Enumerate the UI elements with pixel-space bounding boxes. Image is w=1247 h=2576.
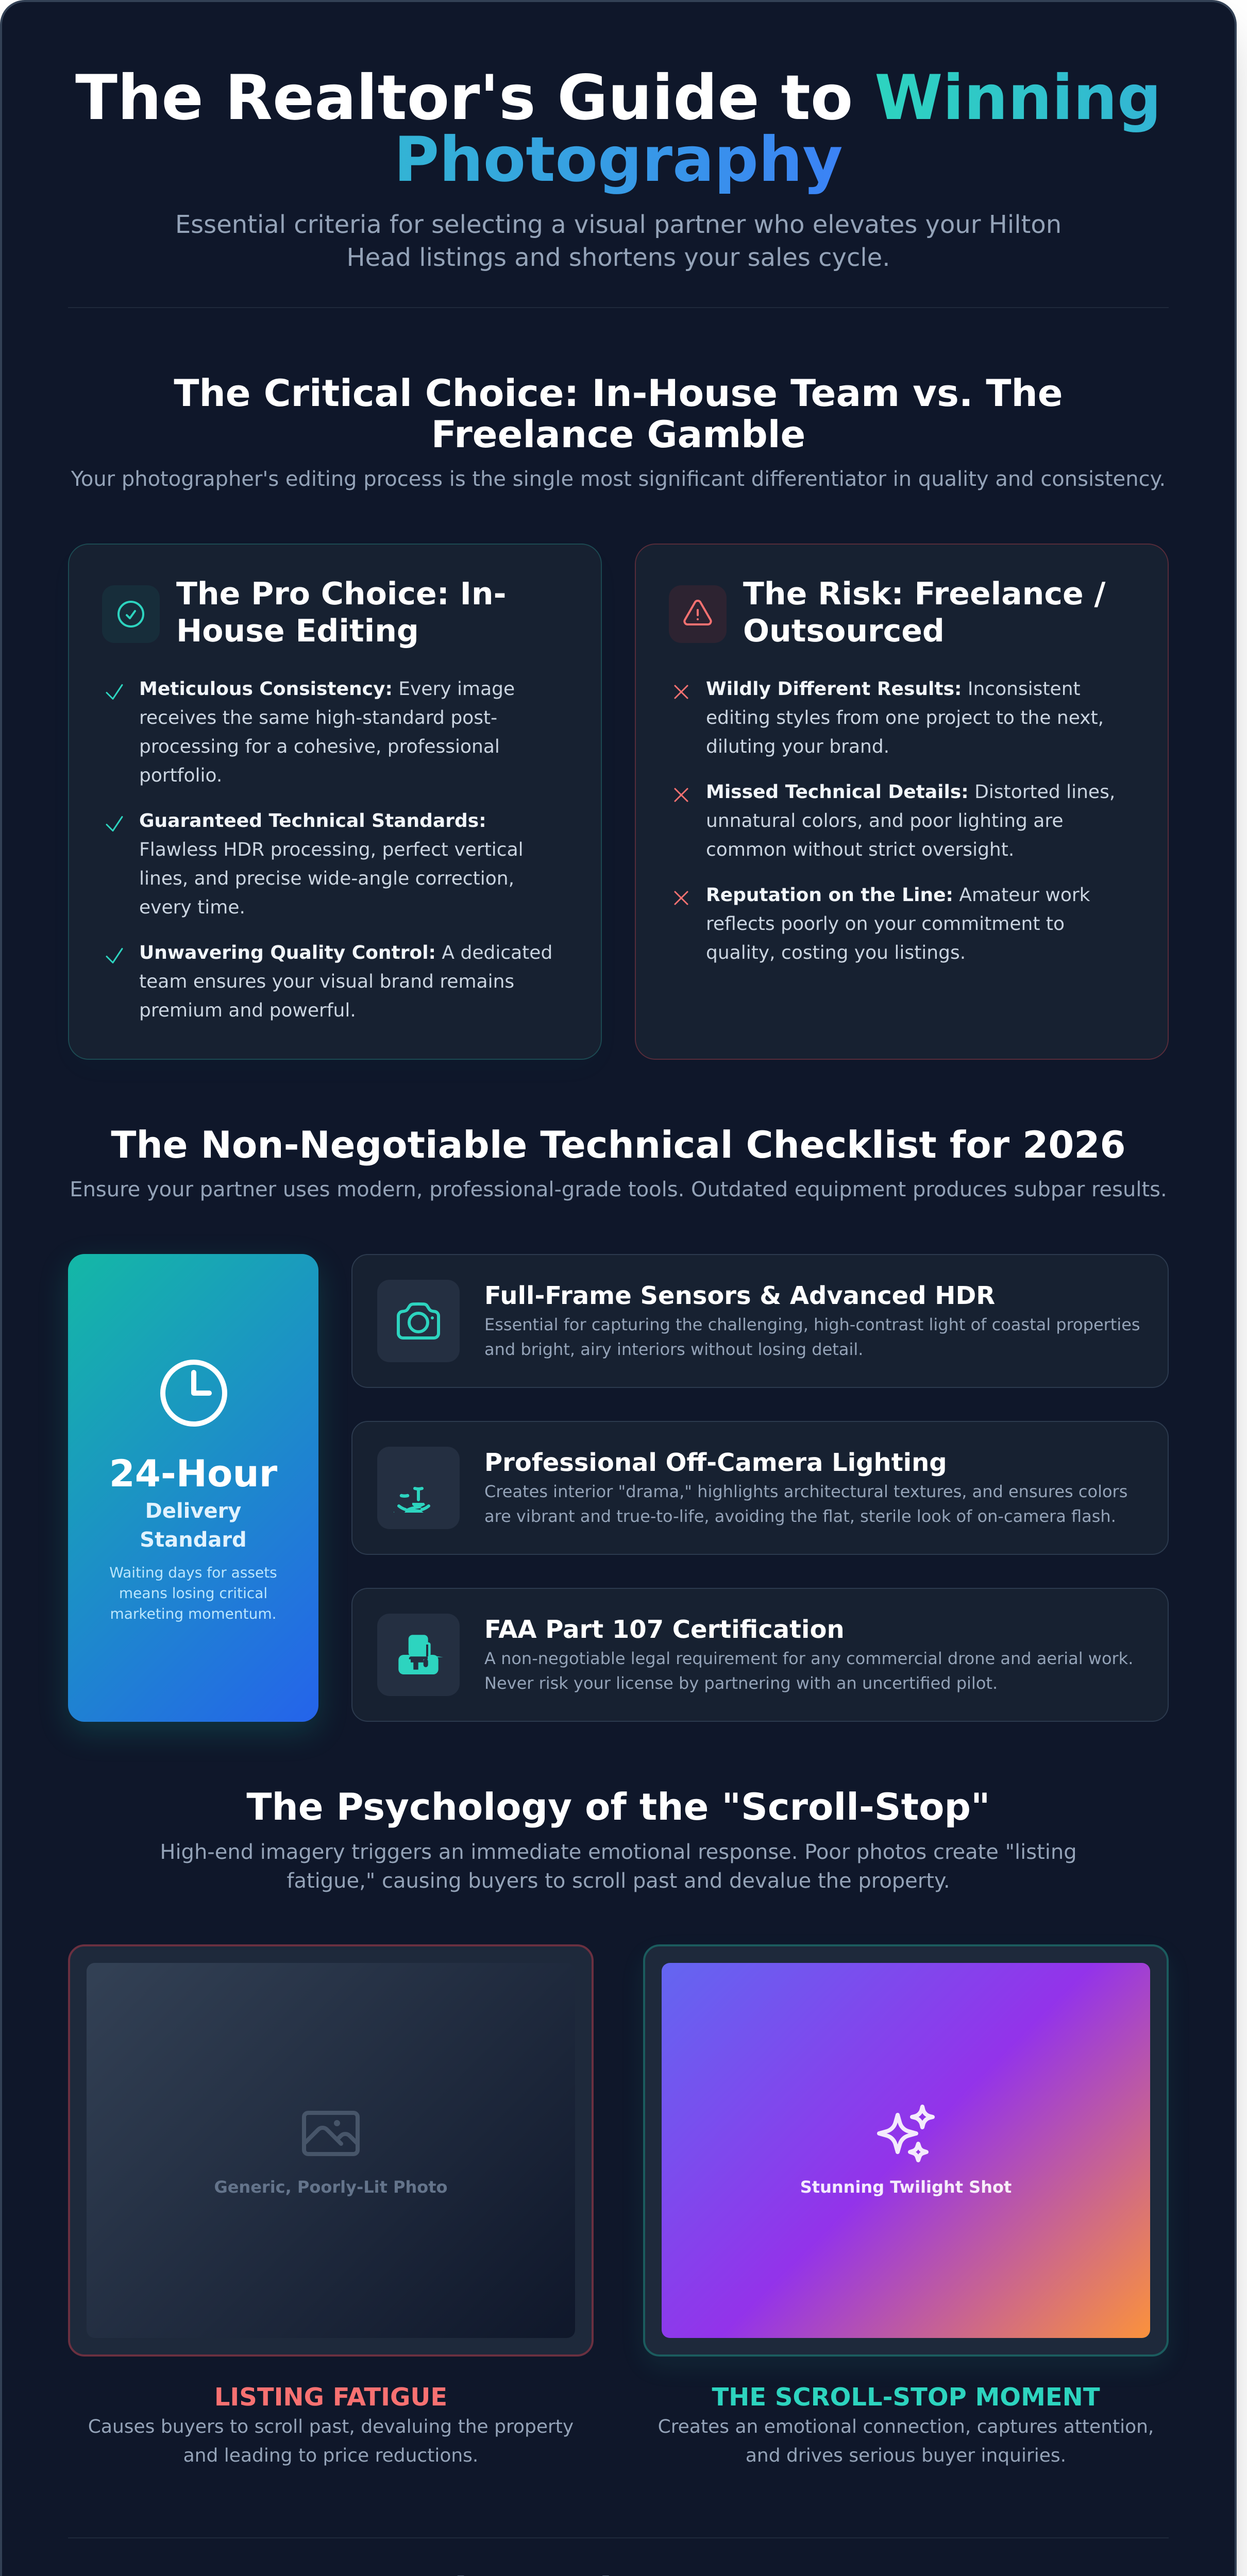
item description [484, 1315, 1140, 1359]
list item: meticulous consistency: Meticulous Consistency: Every image [139, 679, 515, 700]
item description: Creates interior "drama," highlights architectural textures, and ensures colors [484, 1482, 1127, 1501]
list item: guaranteed technical standards: lines, and precise wide-angle correction, [139, 868, 514, 889]
item description: are vibrant and true-to-life, avoiding the flat, sterile look of on-camera flash. [484, 1506, 1116, 1526]
list item: missed technical details: common without strict oversight. [706, 839, 1014, 860]
list item: unwavering quality control: premium and powerful. [139, 1000, 356, 1021]
list item: reputation on the line: Reputation on the Line: Amateur work [706, 885, 1090, 906]
item description: Never risk your license by partnering with an uncertified pilot. [484, 1673, 998, 1693]
icon: photo [298, 2100, 364, 2166]
callout label: Delivery [145, 1499, 241, 1523]
list item: meticulous consistency: processing for a cohesive, professional [139, 736, 500, 757]
icon: check circle [102, 585, 160, 643]
list item: missed technical details [706, 782, 1115, 860]
icon: cross [674, 685, 688, 699]
callout note: Waiting days for assets [109, 1564, 277, 1581]
section intro: emotional response [68, 1838, 1169, 1895]
panel: off-camera lighting [351, 1421, 1169, 1555]
title: The Realtor's Guide to Winning [75, 62, 1161, 134]
item description [484, 1646, 1133, 1696]
icon: cross [674, 788, 688, 802]
caption heading: listing fatigue: LISTING FATIGUE [214, 2383, 447, 2412]
caption text: scroll-stop moment: and drives serious buyer inquiries. [746, 2445, 1066, 2466]
callout: 24-hour delivery standard [68, 1254, 318, 1722]
section intro: emotional response: fatigue," causing buyers to scroll past and devalue the property. [287, 1869, 950, 1893]
icon: drone [377, 1614, 460, 1696]
list item: wildly different results: editing styles from one project to the next, [706, 707, 1104, 728]
callout note [109, 1564, 277, 1622]
list item: unwavering quality control: Unwavering Quality Control: A dedicated [139, 942, 552, 963]
list item: guaranteed technical standards: Guaranteed Technical Standards: [139, 810, 486, 832]
item title: Full-Frame Sensors & Advanced HDR [484, 1281, 995, 1310]
item description [484, 1482, 1127, 1526]
item description: A non-negotiable legal requirement for any commercial drone and aerial work. [484, 1649, 1133, 1668]
icon: lighting [377, 1447, 460, 1529]
icon: clock [160, 1360, 227, 1427]
icon: check [106, 948, 123, 963]
item title: FAA Part 107 Certification [484, 1615, 845, 1644]
icon: warning triangle [669, 585, 727, 643]
list item: guaranteed technical standards: every time. [139, 897, 245, 918]
list item: meticulous consistency: portfolio. [139, 765, 222, 786]
callout note: marketing momentum. [110, 1605, 277, 1622]
list item: guaranteed technical standards [139, 810, 524, 918]
heading: the critical choice: The Critical Choice: In-House Team vs. The [174, 371, 1063, 415]
list item: unwavering quality control [139, 942, 552, 1021]
icon: camera [377, 1280, 460, 1362]
caption text: scroll-stop moment [643, 2413, 1169, 2470]
callout label: Standard [140, 1528, 247, 1552]
callout note: means losing critical [119, 1585, 267, 1602]
image label: Stunning Twilight Shot [800, 2177, 1012, 2197]
title [75, 62, 1161, 196]
list item: guaranteed technical standards: Flawless HDR processing, perfect vertical [139, 839, 524, 860]
caption text: listing fatigue: Causes buyers to scroll past, devaluing the property [88, 2416, 574, 2437]
panel heading: Outsourced [743, 613, 945, 649]
icon: check [106, 816, 123, 832]
section intro: editing process: Your photographer's editing process is the single most significant differentiator in quality and consistency. [71, 467, 1166, 491]
list item: reputation on the line: quality, costing you listings. [706, 942, 966, 963]
list item: meticulous consistency [139, 679, 515, 786]
item description: Essential for capturing the challenging, high-contrast light of coastal properties [484, 1315, 1140, 1334]
subtitle: Head listings and shortens your sales cycle. [347, 243, 890, 272]
section intro: modern tools: Ensure your partner uses modern, professional-grade tools. Outdated equipment produces subpar results. [70, 1178, 1167, 1201]
caption text: listing fatigue: and leading to price reductions. [183, 2445, 478, 2466]
heading: the critical choice: Freelance Gamble [431, 413, 805, 456]
panel: faa part 107 [351, 1588, 1169, 1722]
panel heading [176, 576, 507, 649]
icon: sparkles [873, 2100, 939, 2166]
image label: Generic, Poorly-Lit Photo [214, 2177, 448, 2197]
list item: wildly different results: diluting your brand. [706, 736, 889, 757]
heading: the critical choice [174, 371, 1063, 456]
panel: the risk freelance outsourced [635, 544, 1169, 1060]
panel: generic photo [68, 1944, 594, 2357]
list item: reputation on the line: reflects poorly on your commitment to [706, 913, 1065, 935]
list item: missed technical details: unnatural colors, and poor lighting are [706, 810, 1063, 832]
caption heading: scroll-stop moment: THE SCROLL-STOP MOMENT [712, 2383, 1100, 2412]
panel heading [743, 576, 1106, 649]
title: Photography [394, 124, 843, 196]
list item: unwavering quality control: team ensures your visual brand remains [139, 971, 514, 992]
subtitle [175, 210, 1061, 272]
caption text: scroll-stop moment: Creates an emotional connection, captures attention, [658, 2416, 1154, 2437]
item description: and bright, airy interiors without losing detail. [484, 1340, 863, 1359]
list item: meticulous consistency: receives the same high-standard post- [139, 707, 497, 728]
panel: twilight shot [643, 1944, 1169, 2357]
list item: wildly different results: Wildly Different Results: Inconsistent [706, 679, 1081, 700]
caption text: listing fatigue [68, 2413, 594, 2470]
panel heading: The Pro Choice: In- [176, 576, 507, 612]
callout label [140, 1499, 247, 1552]
list item: wildly different results [706, 679, 1104, 757]
icon: cross [674, 891, 688, 905]
image placeholder: twilight [662, 1963, 1150, 2338]
panel: pro choice in-house editing [68, 544, 602, 1060]
panel: full-frame sensors [351, 1254, 1169, 1388]
heading: technical checklist: The Non-Negotiable Technical Checklist for 2026 [111, 1123, 1126, 1166]
icon: check [106, 684, 123, 700]
subtitle: Essential criteria for selecting a visual partner who elevates your Hilton [175, 210, 1061, 239]
list item: reputation on the line [706, 885, 1090, 963]
image placeholder: poorly-lit [87, 1963, 575, 2338]
callout number: 24-Hour [109, 1452, 277, 1495]
section intro: emotional response: High-end imagery triggers an immediate emotional response. Poor photos create "listing [160, 1840, 1077, 1864]
heading: psychology of the scroll-stop: The Psychology of the "Scroll-Stop" [246, 1785, 990, 1828]
item title: Professional Off-Camera Lighting [484, 1448, 947, 1477]
panel heading: The Risk: Freelance / [743, 576, 1105, 612]
list item: missed technical details: Missed Technical Details: Distorted lines, [706, 782, 1115, 803]
panel heading: House Editing [176, 613, 419, 649]
